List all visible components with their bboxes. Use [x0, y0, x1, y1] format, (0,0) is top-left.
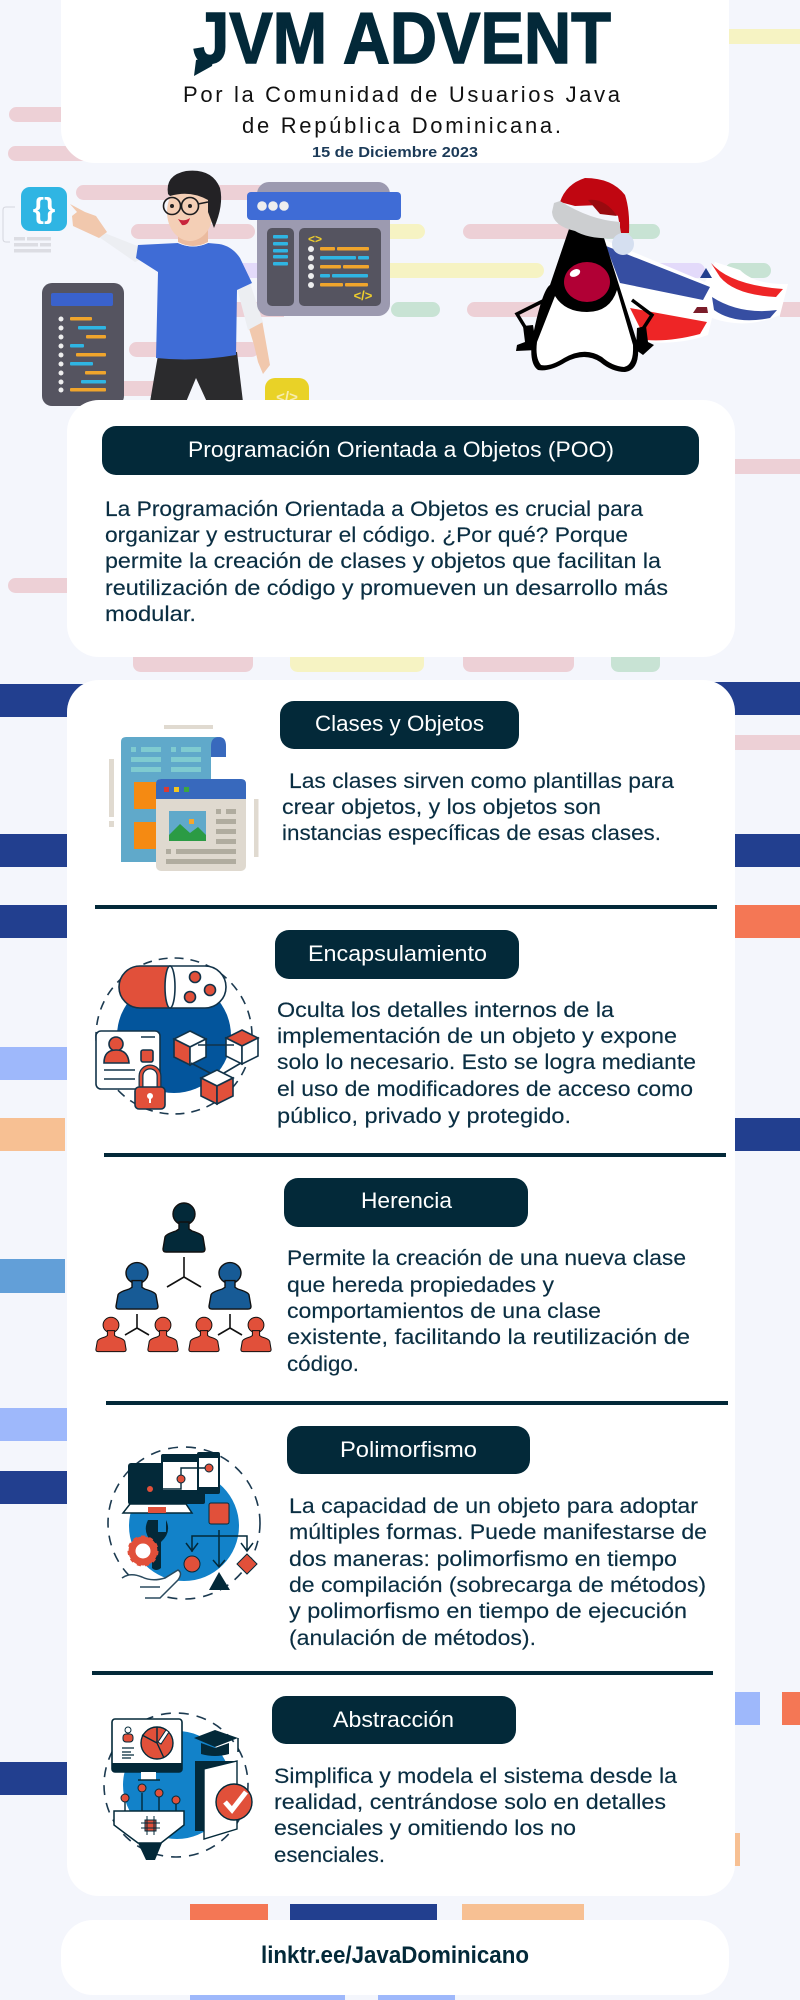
section: Encapsulamiento: Oculta los detalles internos de la: [277, 999, 614, 1022]
nose: [564, 262, 610, 302]
code panel left: [42, 283, 124, 406]
text block: permite la creación de clases y objetos que facilitan la: [105, 550, 661, 573]
icon: yellow code tile: [265, 378, 309, 418]
hat: [560, 178, 629, 233]
code window: </>: [354, 288, 373, 303]
person illustration: [70, 171, 270, 402]
panel: concepts: [67, 680, 735, 1896]
subtitle: [183, 82, 621, 138]
header card: [61, 0, 729, 163]
section: Clases y Objetos: instancias específicas de esas clases.: [282, 822, 661, 845]
heading pill: Programación Orientada a Objetos (POO): [188, 437, 614, 462]
section: Clases y Objetos: [280, 701, 674, 845]
right arm: [248, 320, 270, 374]
section: Polimorfismo: La capacidad de un objeto para adoptar: [289, 1495, 698, 1518]
footer card: linktr.ee/JavaDominicano: [261, 1942, 529, 1969]
subtitle: Por la Comunidad de Usuarios Java: [183, 82, 621, 107]
heading pill: [102, 426, 699, 475]
section: Abstracción: Abstracción: [333, 1707, 454, 1732]
section: Clases y Objetos: crear objetos, y los objetos son: [282, 796, 601, 819]
text block: [105, 498, 668, 626]
section: Clases y Objetos: Las clases sirven como plantillas para: [289, 770, 674, 793]
text block: La Programación Orientada a Objetos es crucial para: [105, 498, 643, 521]
icon: abstraction: [104, 1713, 252, 1860]
subtitle: de República Dominicana.: [242, 113, 561, 138]
section: Abstracción: [272, 1696, 677, 1867]
section: Herencia: [284, 1178, 690, 1376]
section: Polimorfismo: y polimorfismo en tiempo de ejecución: [289, 1600, 687, 1623]
left arm: [99, 232, 140, 262]
section: Herencia: Permite la creación de una nueva clase: [287, 1247, 686, 1270]
icon: classes documents: [109, 725, 258, 871]
section: Encapsulamiento: público, privado y protegido.: [277, 1105, 571, 1128]
section: Polimorfismo: múltiples formas. Puede manifestarse de: [289, 1521, 707, 1544]
section: Polimorfismo: de compilación (sobrecarga de métodos): [289, 1574, 706, 1597]
section: Polimorfismo: Polimorfismo: [340, 1437, 477, 1462]
code window: <>: [308, 232, 322, 246]
icon: polymorphism: [108, 1447, 260, 1599]
section: Abstracción: Simplifica y modela el sistema desde la: [274, 1765, 677, 1788]
trousers: [150, 352, 243, 402]
panel: POO intro: [67, 400, 735, 657]
section: Herencia: comportamientos de una clase: [287, 1300, 601, 1323]
head: [178, 228, 208, 246]
section: Abstracción: esenciales y omitiendo los no: [274, 1817, 576, 1840]
arms: [517, 300, 652, 332]
section: Polimorfismo: [287, 1426, 707, 1650]
section: Polimorfismo: dos maneras: polimorfismo en tiempo: [289, 1548, 677, 1571]
section: Encapsulamiento: [275, 930, 696, 1128]
section: Herencia: que hereda propiedades y: [287, 1274, 555, 1297]
title: JVM ADVENT: [193, 0, 611, 79]
text block: modular.: [105, 603, 196, 626]
flag: [600, 238, 788, 343]
date: 15 de Diciembre 2023: [312, 144, 478, 161]
section: Abstracción: realidad, centrándose solo en detalles: [274, 1791, 666, 1814]
section: Herencia: código.: [287, 1353, 359, 1376]
shirt: [136, 243, 252, 359]
icon: yellow code tile: </>: [276, 389, 298, 406]
section: Herencia: existente, facilitando la reutilización de: [287, 1326, 690, 1349]
icon: curly braces tile: [3, 187, 67, 252]
section: Herencia: Herencia: [361, 1188, 453, 1213]
section: Encapsulamiento: solo lo necesario. Esto se logra mediante: [277, 1051, 696, 1074]
icon: inheritance tree: [96, 1203, 271, 1352]
icon: encapsulation: [96, 958, 258, 1114]
text block: organizar y estructurar el código. ¿Por qué? Porque: [105, 524, 628, 547]
section: Clases y Objetos: Clases y Objetos: [315, 711, 484, 736]
section: Encapsulamiento: Encapsulamiento: [308, 941, 487, 966]
text block: reutilización de código y promueven un desarrollo más: [105, 577, 668, 600]
section: Encapsulamiento: el uso de modificadores de acceso como: [277, 1078, 693, 1101]
body: [531, 229, 638, 372]
code window: [247, 182, 401, 316]
footer card: [61, 1920, 729, 1995]
icon: curly braces tile: {}: [33, 193, 55, 225]
glasses: [164, 198, 208, 214]
section: Polimorfismo: (anulación de métodos).: [289, 1627, 536, 1650]
section: Abstracción: esenciales.: [274, 1844, 385, 1867]
section: Encapsulamiento: implementación de un objeto y expone: [277, 1025, 677, 1048]
Duke mascot with Santa hat: [516, 178, 654, 372]
